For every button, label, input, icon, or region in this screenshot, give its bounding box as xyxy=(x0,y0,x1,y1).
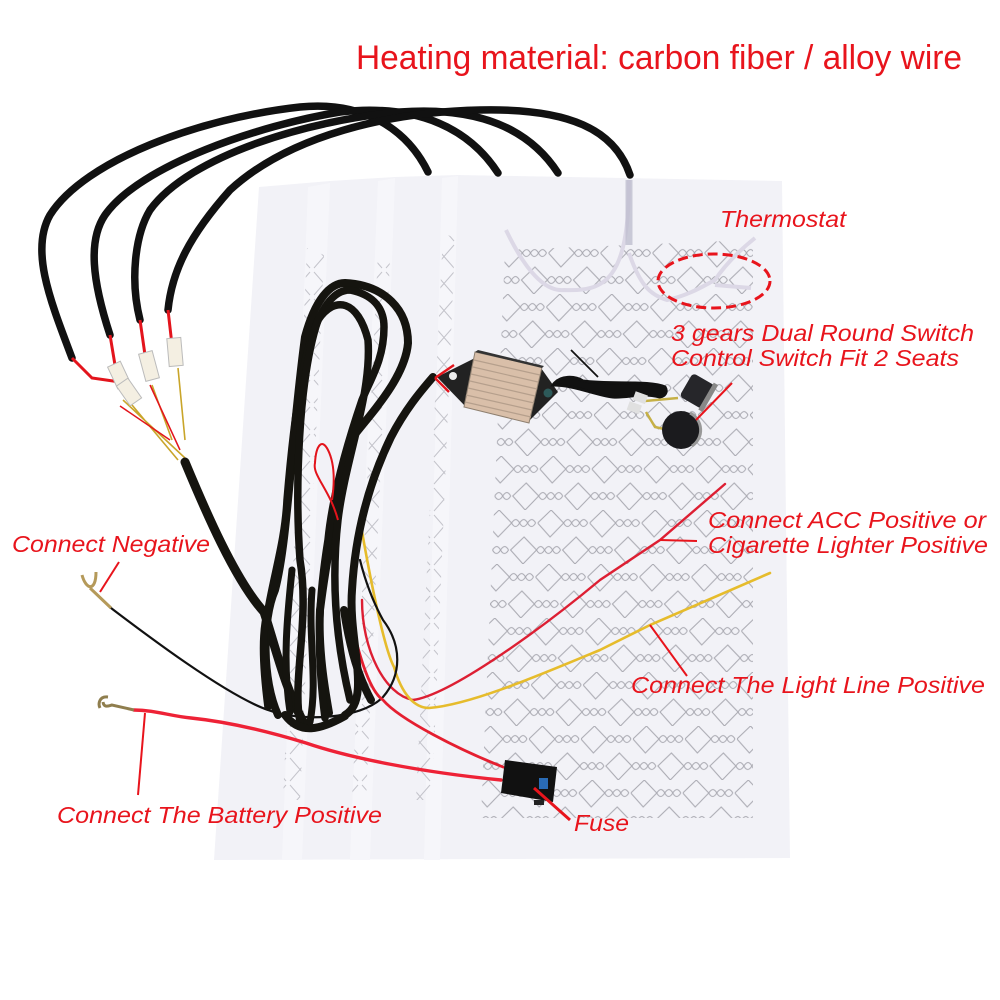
four thick black power cables xyxy=(42,106,630,358)
connectors with red leads xyxy=(72,310,185,460)
switch cable and dual round switches xyxy=(553,350,718,449)
label: fuse: Fuse xyxy=(574,810,629,836)
front sheet heating pattern xyxy=(481,240,753,818)
braided harness bundle xyxy=(185,283,433,728)
label: negative: Connect Negative xyxy=(12,531,210,557)
red loop over harness xyxy=(315,444,338,520)
label: battery positive: Connect The Battery Positive xyxy=(57,802,382,828)
thin wires: red, yellow, negative, battery xyxy=(111,484,770,780)
heating sheets stack xyxy=(214,175,790,860)
label: switch xyxy=(671,320,974,371)
switch two xyxy=(662,411,700,449)
fuse holder xyxy=(501,760,557,805)
wire: second fuse lead xyxy=(348,610,503,767)
leader lines xyxy=(100,383,732,820)
wire: battery positive xyxy=(134,710,501,780)
wire: light line yellow xyxy=(360,520,770,708)
label: ACC positive: Cigarette Lighter Positive xyxy=(708,532,988,558)
back sheet pattern strips xyxy=(283,233,455,800)
title: Heating material: carbon fiber / alloy wire xyxy=(356,39,962,77)
label: switch: 3 gears Dual Round Switch xyxy=(671,320,974,346)
fork terminal battery xyxy=(99,697,134,710)
label: thermostat: Thermostat xyxy=(720,206,848,232)
control box xyxy=(435,350,558,423)
thermostat lead traces xyxy=(506,180,755,300)
label: light line positive: Connect The Light Line Positive xyxy=(631,672,985,698)
thermostat dashed ellipse xyxy=(658,254,770,308)
fork terminal negative xyxy=(82,572,111,608)
wire: negative black xyxy=(111,560,397,717)
switch one xyxy=(678,371,718,412)
label: ACC positive: Connect ACC Positive or xyxy=(708,507,987,533)
wire: ACC positive red xyxy=(362,484,725,700)
label: ACC positive xyxy=(708,507,988,558)
label: switch: Control Switch Fit 2 Seats xyxy=(671,345,959,371)
